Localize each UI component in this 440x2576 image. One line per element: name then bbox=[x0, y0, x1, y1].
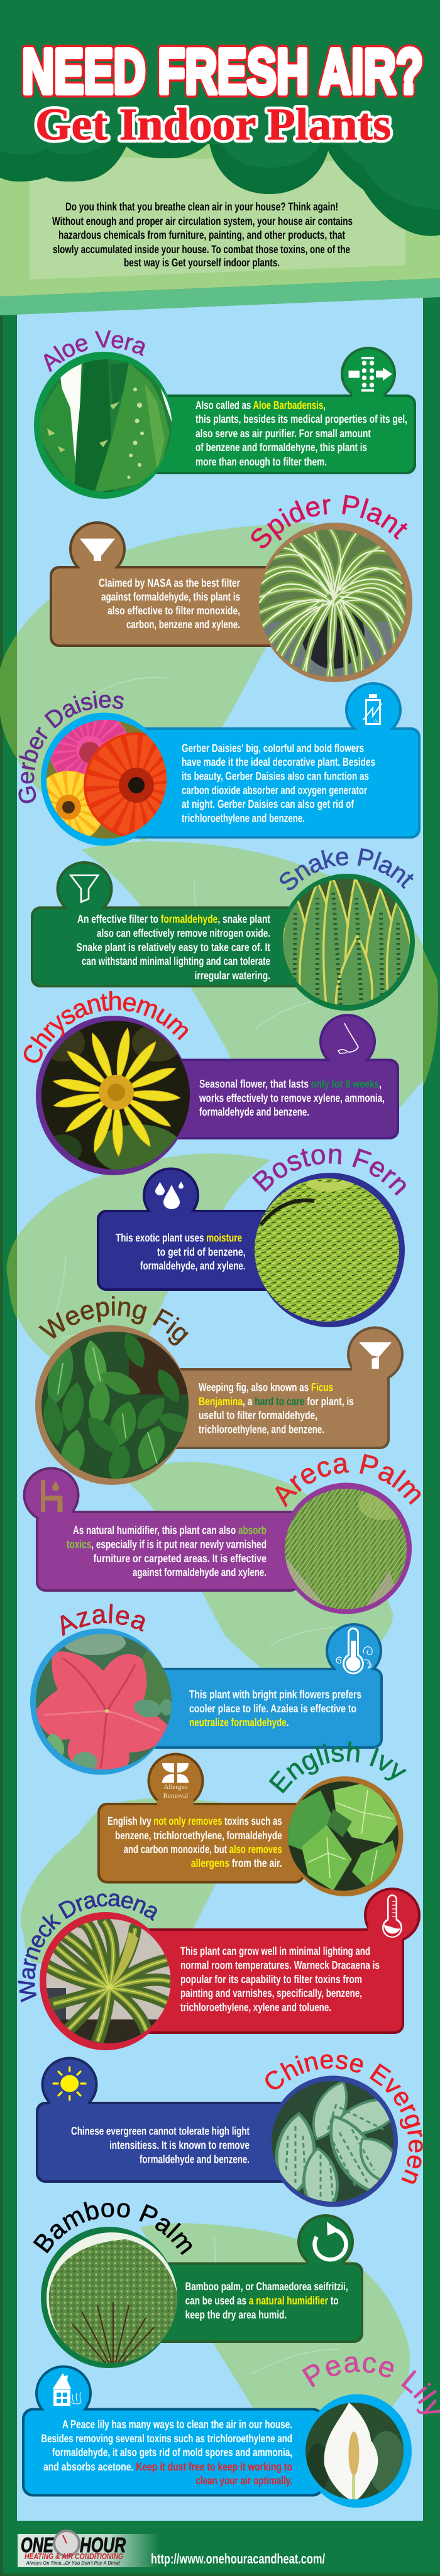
description: Boston Fern: This exotic plant uses moisture bbox=[116, 1231, 242, 1244]
icon: water drops bbox=[155, 1182, 184, 1209]
description: Spider Plant: also effective to filter monoxide, bbox=[107, 604, 240, 617]
intro text: hazardous chemicals from furniture, painting, and other products, that bbox=[58, 229, 345, 241]
description: Weeping Fig: Benjamina, a hard to care for plant, is bbox=[199, 1395, 354, 1408]
heading: Aloe Vera: Aloe Vera bbox=[44, 330, 145, 373]
description: English Ivy: benzene, trichloroethylene, formaldehyde bbox=[115, 1829, 282, 1842]
panel: Boston Fern bbox=[97, 1148, 406, 1327]
description: Peace Lily: formaldehyde, it also gets rid of mold spores and ammonia, bbox=[52, 2446, 292, 2459]
panel: Warneck Dracaena bbox=[18, 1888, 421, 2050]
description: Warneck Dracaena: This plant can grow well in minimal lighting and bbox=[180, 1945, 370, 1957]
heading: Chrysanthemum: Chrysanthemum bbox=[24, 991, 188, 1063]
subtitle: Get Indoor Plants bbox=[35, 99, 391, 149]
icon: thermometer bbox=[382, 1894, 402, 1938]
panel: English Ivy bbox=[97, 1741, 407, 1896]
description: Aloe Vera: also serve as air purifier. For small amount bbox=[195, 427, 371, 440]
description: Areca Palm: against formaldehyde and xylene. bbox=[133, 1566, 267, 1579]
description: Spider Plant: against formaldehyde, this plant is bbox=[101, 590, 240, 603]
panel: Chrysanthemum bbox=[24, 991, 399, 1175]
photo: warneck dracaena bbox=[44, 1916, 173, 2048]
description: Bamboo Palm: can be used as a natural humidifier to bbox=[185, 2294, 339, 2307]
icon: sun bbox=[53, 2067, 85, 2100]
icon: chair with drop bbox=[41, 1480, 63, 1512]
logo: One Hour Heating and Air Conditioning: Always On Time...Or You Don't Pay A Dime! bbox=[26, 2560, 121, 2566]
icon: house with air bbox=[53, 2373, 82, 2406]
description: Boston Fern bbox=[116, 1231, 245, 1272]
description: Peace Lily bbox=[41, 2418, 292, 2487]
description: Warneck Dracaena: trichloroethylene, xylene and toluene. bbox=[180, 2001, 331, 2014]
icon: oxygen tank: O₂ bbox=[374, 720, 379, 724]
description: Snake Plant: irregular watering. bbox=[195, 969, 270, 982]
description: English Ivy: allergens from the air. bbox=[191, 1857, 282, 1869]
description: Snake Plant: also can effectively remove nitrogen oxide. bbox=[97, 927, 270, 940]
description: English Ivy bbox=[107, 1815, 282, 1869]
description: Bamboo Palm bbox=[185, 2280, 348, 2321]
icon: allergen removal: Allergen bbox=[163, 1783, 188, 1791]
description: Chrysanthemum: formaldehyde and benzene. bbox=[199, 1106, 309, 1118]
description: Bamboo Palm: keep the dry area humid. bbox=[185, 2308, 287, 2321]
heading: Chinese Evergreen: Chinese Evergreen bbox=[265, 2054, 423, 2183]
description: Weeping Fig: trichloroethylene, and benzene. bbox=[199, 1423, 324, 1436]
photo: bamboo palm bbox=[44, 2230, 179, 2365]
photo: gerber daisies bbox=[47, 720, 167, 839]
description: Aloe Vera: Also called as Aloe Barbadensis, bbox=[195, 399, 326, 411]
photo: boston fern bbox=[251, 1175, 402, 1325]
icon: circular arrow bbox=[315, 2222, 346, 2259]
description: Gerber Daisies: its beauty, Gerber Daisies also can function as bbox=[182, 770, 369, 783]
description: Warneck Dracaena: normal room temperatures. Warneck Dracaena is bbox=[180, 1959, 380, 1971]
description: Spider Plant bbox=[99, 577, 240, 631]
heading: Warneck Dracaena: Warneck Dracaena bbox=[18, 1893, 157, 2003]
photo: aloe vera bbox=[38, 358, 176, 494]
intro text: Do you think that you breathe clean air in your house? Think again! bbox=[65, 200, 338, 213]
description: Snake Plant: An effective filter to formaldehyde, snake plant bbox=[77, 913, 270, 925]
icon: oxygen tank bbox=[363, 694, 382, 725]
description: Peace Lily: clean your air optimally. bbox=[195, 2474, 292, 2487]
description: Areca Palm: furniture or carpeted areas. It is effective bbox=[93, 1552, 267, 1565]
photo: areca palm bbox=[283, 1487, 409, 1614]
description: Peace Lily: Besides removing several toxins such as trichloroethylene and bbox=[41, 2432, 292, 2445]
photo: chrysanthemum bbox=[41, 1021, 190, 1170]
description: Chinese Evergreen: intensitiess. It is known to remove bbox=[109, 2139, 250, 2151]
description: Gerber Daisies bbox=[182, 742, 375, 824]
description: Gerber Daisies: carbon dioxide absorber and oxygen generator bbox=[182, 784, 367, 796]
description: Peace Lily: and absorbs acetone. Keep it dust free to keep it working to bbox=[43, 2460, 292, 2473]
header background bbox=[0, 0, 440, 315]
description: English Ivy: and carbon monoxide, but also removes bbox=[124, 1843, 282, 1856]
description: Aloe Vera bbox=[195, 399, 407, 468]
background leaves bbox=[0, 523, 438, 2425]
logo: One Hour Heating and Air Conditioning: HEATING & AIR CONDITIONING bbox=[25, 2552, 123, 2561]
intro text bbox=[52, 200, 353, 269]
description: Areca Palm bbox=[67, 1524, 267, 1579]
icon: funnel bbox=[359, 1342, 392, 1369]
description: Boston Fern: to get rid of benzene, bbox=[157, 1246, 245, 1258]
description: Snake Plant: can withstand minimal lighting and can tolerate bbox=[82, 955, 270, 967]
panel: Weeping Fig bbox=[35, 1296, 404, 1485]
description: Spider Plant: Claimed by NASA as the best filter bbox=[99, 577, 240, 589]
description: English Ivy: English Ivy not only removes toxins such as bbox=[107, 1815, 282, 1827]
heading: Gerber Daisies: Gerber Daisies bbox=[18, 691, 124, 803]
icon: funnel bbox=[80, 539, 115, 561]
heading: Boston Fern: Boston Fern bbox=[251, 1148, 406, 1196]
icon: allergen removal bbox=[162, 1763, 189, 1800]
description: Boston Fern: formaldehyde, and xylene. bbox=[140, 1259, 245, 1272]
description: Azalea: cooler place to life. Azalea is effective to bbox=[189, 1702, 356, 1715]
description: Azalea bbox=[189, 1688, 361, 1729]
logo: One Hour Heating and Air Conditioning: ONE bbox=[21, 2533, 54, 2557]
panel: Snake Plant bbox=[31, 848, 415, 1011]
panel: Chinese Evergreen bbox=[36, 2054, 423, 2207]
intro text: best way is Get yourself indoor plants. bbox=[124, 256, 280, 269]
description: Gerber Daisies: at night. Gerber Daisies can also get rid of bbox=[182, 798, 355, 810]
heading: Areca Palm: Areca Palm bbox=[275, 1454, 421, 1508]
description: Weeping Fig bbox=[199, 1381, 354, 1436]
icon: thermometer with wind bbox=[336, 1628, 372, 1674]
description: Areca Palm: As natural humidifier, this plant can also absorb bbox=[73, 1524, 267, 1536]
heading: English Ivy: English Ivy bbox=[269, 1741, 407, 1794]
description: Weeping Fig: useful to filter formaldehyde, bbox=[199, 1409, 317, 1421]
description: Bamboo Palm: Bamboo palm, or Chamaedorea seifritzii, bbox=[185, 2280, 348, 2293]
panel: Bamboo Palm bbox=[33, 2202, 363, 2368]
photo: chinese evergreen bbox=[272, 2081, 393, 2202]
icon: allergen removal: Removal bbox=[163, 1792, 188, 1800]
heading: Weeping Fig: Weeping Fig bbox=[38, 1296, 189, 1345]
logo: One Hour Heating and Air Conditioning: HOUR bbox=[80, 2533, 126, 2557]
description: Warneck Dracaena bbox=[180, 1945, 380, 2014]
description: Chinese Evergreen: formaldehyde and benzene. bbox=[140, 2153, 250, 2166]
icon: air filter bbox=[348, 357, 392, 392]
description: Azalea: This plant with bright pink flowers prefers bbox=[189, 1688, 361, 1701]
photo: english ivy bbox=[288, 1781, 399, 1891]
subtitle: Get Indoor Plants bbox=[35, 99, 391, 149]
photo: azalea bbox=[36, 1634, 172, 1769]
photo: spider plant bbox=[259, 530, 406, 677]
description: Chrysanthemum bbox=[199, 1078, 385, 1118]
panel: Aloe Vera bbox=[34, 330, 416, 499]
heading: Spider Plant: Spider Plant bbox=[251, 495, 407, 548]
description: Chrysanthemum: Seasonal flower, that lasts only for 6 weeks, bbox=[199, 1078, 382, 1090]
description: Spider Plant: carbon, benzene and xylene. bbox=[126, 618, 240, 631]
description: Gerber Daisies: Gerber Daisies' big, colorful and bold flowers bbox=[182, 742, 364, 754]
panel: Areca Palm bbox=[23, 1454, 421, 1614]
description: Chrysanthemum: works effectively to remove xylene, ammonia, bbox=[199, 1092, 385, 1104]
icon: funnel outline bbox=[70, 876, 98, 902]
description: Warneck Dracaena: painting and varnishes, specifically, benzene, bbox=[180, 1987, 362, 1999]
description: Azalea: neutralize formaldehyde. bbox=[189, 1716, 289, 1729]
description: Peace Lily: A Peace lily has many ways to clean the air in our house. bbox=[62, 2418, 292, 2431]
logo: One Hour Heating and Air Conditioning bbox=[18, 2531, 159, 2567]
description: Chinese Evergreen bbox=[71, 2124, 250, 2166]
description: Gerber Daisies: have made it the ideal decorative plant. Besides bbox=[182, 756, 375, 768]
panel: Peace Lily bbox=[22, 2356, 440, 2508]
panel: Spider Plant bbox=[50, 495, 412, 682]
heading: Bamboo Palm: Bamboo Palm bbox=[33, 2202, 192, 2255]
heading: Azalea: Azalea bbox=[60, 1604, 145, 1636]
description: Weeping Fig: Weeping fig, also known as Ficus bbox=[199, 1381, 333, 1393]
description: Snake Plant bbox=[77, 913, 270, 982]
description: Areca Palm: toxics, especially if is it put near newly varnished bbox=[67, 1538, 267, 1550]
website url: http://www.onehouracandheat.com/ bbox=[151, 2551, 325, 2567]
description: Snake Plant: Snake plant is relatively easy to take care of. It bbox=[77, 941, 270, 954]
panel: Gerber Daisies bbox=[18, 682, 421, 845]
photo: peace lily bbox=[304, 2401, 405, 2501]
description: Warneck Dracaena: popular for its capability to filter toxins from bbox=[180, 1973, 362, 1986]
photo: weeping fig bbox=[41, 1332, 189, 1479]
icon: nose bbox=[338, 1023, 358, 1053]
description: Aloe Vera: of benzene and formaldehyne, this plant is bbox=[195, 441, 367, 454]
description: Aloe Vera: more than enough to filter them. bbox=[195, 455, 327, 468]
heading: Snake Plant: Snake Plant bbox=[279, 848, 414, 891]
panel: Azalea bbox=[30, 1604, 383, 1775]
description: Gerber Daisies: trichloroethylene and benzene. bbox=[182, 812, 305, 824]
description: Chinese Evergreen: Chinese evergreen cannot tolerate high light bbox=[71, 2124, 250, 2137]
photo: snake plant bbox=[283, 879, 410, 1005]
